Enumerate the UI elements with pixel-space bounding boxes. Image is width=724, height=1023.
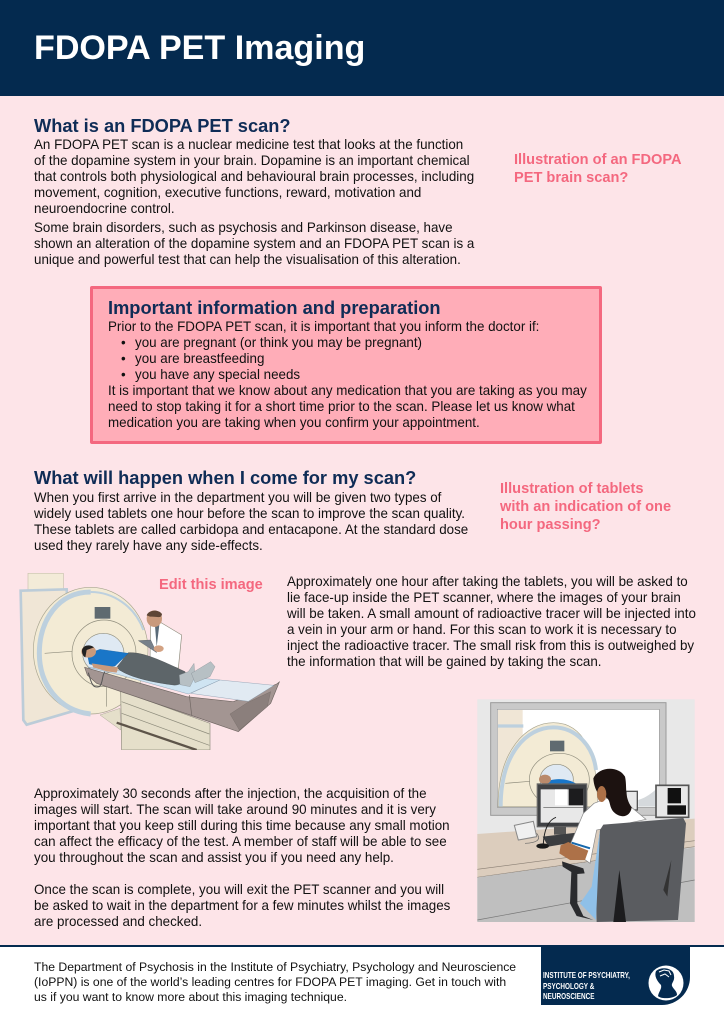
text block: tablets: used they rarely have any side-effects.	[34, 538, 263, 553]
panel text: you have any special needs	[135, 367, 300, 382]
heading: what is an FDOPA PET scan: What is an FDOPA PET scan?	[34, 115, 291, 136]
text block: acquisition: can affect the efficacy of the test. A member of staff will be able to see	[34, 834, 447, 849]
text block: acquisition: are processed and checked.	[34, 914, 202, 929]
text block: scanning procedure: a vein in your arm or hand. For this scan to work it is necessary to	[287, 622, 677, 637]
text block: scan introduction: Some brain disorders, such as psychosis and Parkinson disease, have	[34, 220, 453, 235]
panel text: you are pregnant (or think you may be pregnant)	[135, 335, 422, 350]
panel text	[108, 319, 587, 430]
panel text: Prior to the FDOPA PET scan, it is important that you inform the doctor if:	[108, 319, 539, 334]
text block: scanning procedure: inject the radioactive tracer. The small risk from this is outweighed by	[287, 638, 694, 653]
panel text: you are breastfeeding	[135, 351, 264, 366]
text block: scan introduction: shown an alteration of the dopamine system and an FDOPA PET scan is a	[34, 236, 474, 251]
text block: scan introduction	[34, 137, 474, 267]
header banner	[0, 0, 724, 96]
panel heading: Important information and preparation	[108, 297, 441, 318]
text block: acquisition: Once the scan is complete, you will exit the PET scanner and you will	[34, 882, 444, 897]
logo text	[543, 971, 630, 1001]
placeholder: brain scan illustration: PET brain scan?	[514, 170, 628, 186]
placeholder: brain scan illustration: Illustration of an FDOPA	[514, 152, 682, 168]
placeholder: brain scan illustration	[514, 152, 682, 186]
text block: scanning procedure	[287, 574, 696, 669]
text block: scan introduction: of the dopamine system in your brain. Dopamine is an important chemical	[34, 153, 470, 168]
footer text: us if you want to know more about this imaging technique.	[34, 990, 347, 1004]
panel text: medication you are taking when you confirm your appointment.	[108, 415, 480, 430]
text block: scanning procedure: lie face-up inside the PET scanner, where the images of your brain	[287, 590, 681, 605]
panel text: •	[121, 367, 126, 382]
text block: scan introduction: An FDOPA PET scan is a nuclear medicine test that looks at the function	[34, 137, 463, 152]
logo text: INSTITUTE OF PSYCHIATRY,	[543, 971, 630, 980]
text block: scanning procedure: will be taken. A small amount of radioactive tracer will be injected into	[287, 606, 696, 621]
text block: tablets: These tablets are called carbidopa and entacapone. At the standard dose	[34, 522, 468, 537]
heading: what will happen: What will happen when I come for my scan?	[34, 467, 416, 488]
placeholder: edit this image: Edit this image	[159, 577, 263, 593]
panel text: •	[121, 351, 126, 366]
placeholder: tablets illustration: with an indication of one	[500, 499, 671, 515]
text block: scan introduction: neuroendocrine control.	[34, 201, 175, 216]
footer text: The Department of Psychosis in the Institute of Psychiatry, Psychology and Neuroscience	[34, 960, 516, 974]
placeholder: tablets illustration: Illustration of tablets	[500, 481, 644, 497]
title: FDOPA PET Imaging	[34, 29, 365, 67]
text block: acquisition: images will start. The scan will take around 90 minutes and it is very	[34, 802, 436, 817]
panel text: It is important that we know about any medication that you are taking as you may	[108, 383, 587, 398]
panel text: •	[121, 335, 126, 350]
illustration: patient on PET scanner with doctor	[19, 573, 280, 750]
text block: scan introduction: that controls both physiological and behavioural brain processes, including	[34, 169, 474, 184]
text block: tablets: When you first arrive in the department you will be given two types of	[34, 490, 441, 505]
footer divider	[0, 945, 724, 947]
placeholder: tablets illustration: hour passing?	[500, 517, 601, 533]
illustration: technician at control room	[477, 700, 695, 922]
text block: scan introduction: movement, cognition, executive functions, reward, motivation and	[34, 185, 421, 200]
text block: tablets: widely used tablets one hour before the scan to improve the scan quality.	[34, 506, 465, 521]
logo: institute	[541, 946, 690, 1005]
text block: acquisition: you throughout the scan and assist you if you need any help.	[34, 850, 394, 865]
footer text	[34, 960, 516, 1004]
text block: tablets	[34, 490, 468, 553]
text block: scanning procedure: Approximately one hour after taking the tablets, you will be asked to	[287, 574, 688, 589]
panel text: need to stop taking it for a short time prior to the scan. Please let us know what	[108, 399, 575, 414]
text block: scanning procedure: the information that will be gained by taking the scan.	[287, 654, 602, 669]
logo emblem	[648, 966, 684, 1000]
text block: acquisition: be asked to wait in the department for a few minutes whilst the images	[34, 898, 450, 913]
text block: acquisition: important that you keep still during this time because any small motion	[34, 818, 450, 833]
panel: important information	[90, 286, 602, 444]
text block: acquisition: Approximately 30 seconds after the injection, the acquisition of the	[34, 786, 427, 801]
logo text: NEUROSCIENCE	[543, 992, 594, 1001]
text block: scan introduction: unique and powerful test that can help the visualisation of this alteration.	[34, 252, 461, 267]
placeholder: tablets illustration	[500, 481, 671, 533]
footer text: (IoPPN) is one of the world’s leading centres for FDOPA PET imaging. Get in touch with	[34, 975, 506, 989]
logo text: PSYCHOLOGY &	[543, 982, 594, 990]
text block: acquisition	[34, 786, 450, 929]
